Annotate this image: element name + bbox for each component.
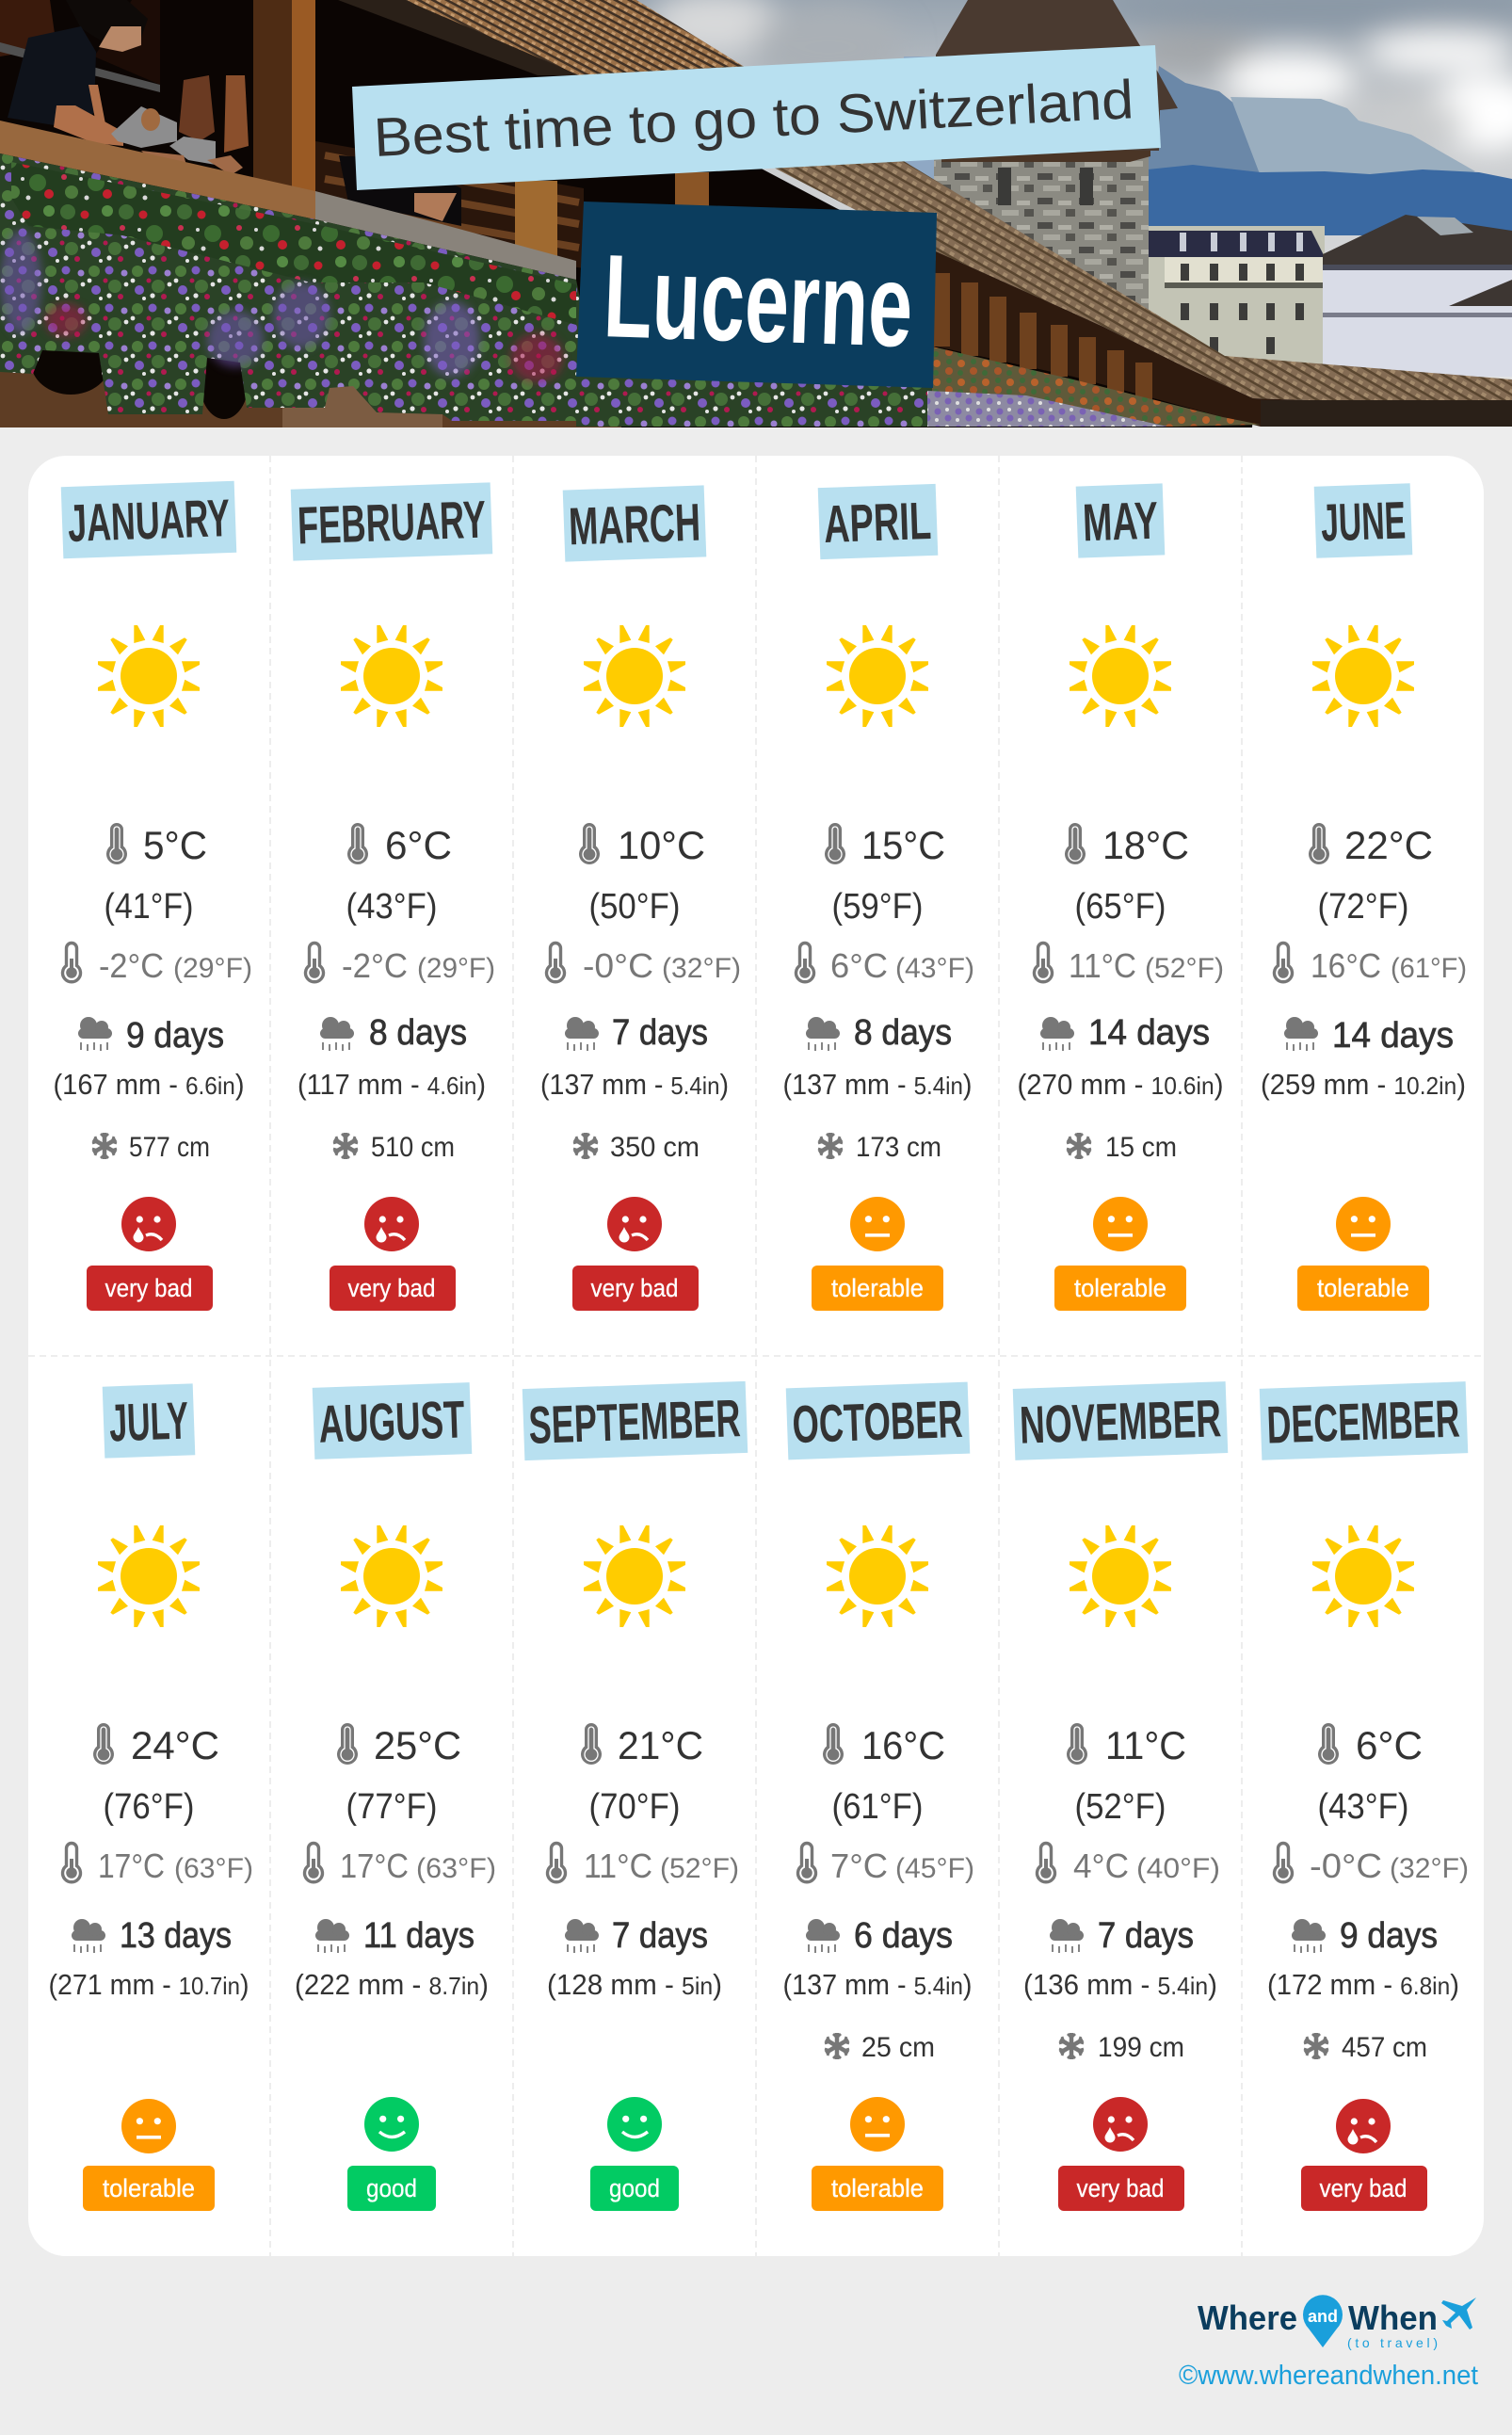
month label xyxy=(563,485,706,562)
rating badge xyxy=(1297,1266,1429,1311)
snowfall: 457 cm xyxy=(1342,2032,1427,2063)
icon: sun xyxy=(341,1525,442,1627)
month label xyxy=(523,1381,748,1460)
rain days: 9 days xyxy=(126,1016,224,1056)
rating badge xyxy=(83,2166,215,2211)
month label xyxy=(313,1382,472,1459)
logo: Where and When: Where xyxy=(1198,2298,1297,2337)
month label: JANUARY xyxy=(67,488,231,553)
low temperature: (63°F) xyxy=(174,1853,253,1884)
rain days: 9 days xyxy=(1340,1916,1438,1956)
rain days xyxy=(565,1916,708,1956)
low temperature xyxy=(1037,1844,1220,1885)
high temperature in Fahrenheit: (77°F) xyxy=(346,1787,437,1827)
low temperature: (32°F) xyxy=(1390,1853,1469,1884)
snowfall xyxy=(818,1132,941,1163)
precipitation: (172 mm - 6.8in) xyxy=(1267,1968,1459,2001)
rain days xyxy=(1292,1916,1438,1956)
month label xyxy=(61,481,236,558)
low temperature xyxy=(305,943,495,985)
rating icon xyxy=(1093,1197,1148,1251)
icon: airplane xyxy=(1441,2298,1476,2330)
logo: Where and When: When xyxy=(1348,2298,1438,2337)
high temperature in Fahrenheit: (70°F) xyxy=(589,1787,680,1827)
low temperature: -2°C xyxy=(342,946,408,985)
rain days xyxy=(72,1916,232,1956)
rain days xyxy=(315,1916,475,1956)
low temperature: (29°F) xyxy=(417,953,495,984)
icon: sun xyxy=(98,625,200,727)
rain days xyxy=(565,1013,708,1053)
icon: sun xyxy=(584,625,685,727)
rating icon xyxy=(850,2097,905,2152)
city banner xyxy=(576,202,937,388)
rating badge xyxy=(1058,2166,1184,2211)
month label: JULY xyxy=(108,1391,189,1452)
month label xyxy=(1013,1381,1228,1460)
rating badge xyxy=(572,1266,699,1311)
precipitation: (137 mm - 5.4in) xyxy=(783,1968,972,2001)
logo: Where and When xyxy=(1198,2295,1476,2350)
high temperature in Fahrenheit: (43°F) xyxy=(346,887,437,927)
month label: OCTOBER xyxy=(791,1389,964,1454)
month label: AUGUST xyxy=(317,1389,466,1454)
title text: Best time to go to Switzerland xyxy=(372,69,1135,169)
logo: Where and When: (to travel) xyxy=(1347,2335,1438,2350)
icon: sun xyxy=(827,625,928,727)
month label xyxy=(1314,483,1412,558)
high temperature xyxy=(106,823,207,867)
precipitation: (136 mm - 5.4in) xyxy=(1023,1968,1217,2001)
rain days xyxy=(320,1013,467,1053)
rating badge xyxy=(347,2166,436,2211)
header photo: Chapel Bridge in Lucerne xyxy=(0,0,1512,427)
snowfall xyxy=(1059,2032,1184,2063)
rating badge xyxy=(87,1266,213,1311)
high temperature in Fahrenheit: (72°F) xyxy=(1318,887,1408,927)
rain days: 13 days xyxy=(120,1916,232,1956)
rating icon xyxy=(607,1197,662,1251)
low temperature xyxy=(1275,943,1467,985)
high temperature xyxy=(581,1723,703,1767)
low temperature xyxy=(305,1844,496,1885)
rating icon xyxy=(121,2099,176,2153)
rating badge: tolerable xyxy=(1074,1274,1166,1302)
month label: NOVEMBER xyxy=(1019,1388,1222,1455)
high temperature xyxy=(1067,1723,1186,1767)
rating badge: tolerable xyxy=(103,2174,195,2202)
month: February xyxy=(291,482,495,1311)
precipitation: (137 mm - 5.4in) xyxy=(540,1068,729,1101)
rating badge xyxy=(1301,2166,1427,2211)
month label: MARCH xyxy=(568,492,701,556)
rain days: 7 days xyxy=(612,1013,708,1053)
icon: sun xyxy=(1312,625,1414,727)
rating badge: good xyxy=(366,2174,417,2202)
snowfall: 15 cm xyxy=(1105,1132,1177,1163)
high temperature: 25°C xyxy=(374,1723,461,1767)
high temperature: 11°C xyxy=(1105,1723,1186,1767)
high temperature xyxy=(825,823,945,867)
snowfall: 577 cm xyxy=(129,1132,210,1163)
month label xyxy=(1076,483,1165,558)
high temperature in Fahrenheit: (43°F) xyxy=(1318,1787,1408,1827)
icon: sun xyxy=(1312,1525,1414,1627)
high temperature in Fahrenheit: (52°F) xyxy=(1075,1787,1166,1827)
month: August xyxy=(295,1382,496,2211)
month label xyxy=(786,1382,970,1459)
rating icon xyxy=(364,2097,419,2152)
snowfall: 199 cm xyxy=(1098,2032,1184,2063)
high temperature in Fahrenheit: (41°F) xyxy=(104,887,194,927)
low temperature: 17°C xyxy=(340,1846,409,1885)
low temperature: -0°C xyxy=(583,946,653,985)
rating icon xyxy=(1336,1197,1391,1251)
low temperature xyxy=(546,943,741,985)
high temperature: 21°C xyxy=(618,1723,703,1767)
month label xyxy=(291,482,492,561)
icon: sun xyxy=(341,625,442,727)
snowfall xyxy=(1304,2032,1427,2063)
month label xyxy=(818,484,938,559)
low temperature: 4°C xyxy=(1073,1846,1129,1885)
month label: JUNE xyxy=(1320,490,1407,553)
icon: sun xyxy=(1070,625,1171,727)
rating badge: good xyxy=(609,2174,660,2202)
snowfall xyxy=(92,1132,210,1163)
rating badge: tolerable xyxy=(1317,1274,1409,1302)
snowfall: 173 cm xyxy=(856,1132,941,1163)
rating badge xyxy=(812,1266,943,1311)
title banner xyxy=(352,45,1161,190)
rating icon xyxy=(1093,2097,1148,2152)
rating badge xyxy=(1054,1266,1186,1311)
low temperature: 6°C xyxy=(830,946,888,985)
low temperature: (52°F) xyxy=(1145,953,1224,984)
snowfall xyxy=(825,2032,935,2063)
high temperature in Fahrenheit: (59°F) xyxy=(832,887,923,927)
snowfall xyxy=(573,1132,700,1163)
high temperature: 15°C xyxy=(861,823,945,867)
rating badge: very bad xyxy=(1320,2174,1407,2202)
month: January xyxy=(53,481,252,1311)
rain days: 8 days xyxy=(369,1013,467,1053)
city name: Lucerne xyxy=(602,231,915,372)
rating badge: very bad xyxy=(348,1274,435,1302)
rating badge xyxy=(330,1266,456,1311)
rating badge: tolerable xyxy=(831,2174,924,2202)
low temperature: 7°C xyxy=(830,1846,888,1885)
snowfall: 510 cm xyxy=(371,1132,455,1163)
precipitation: (270 mm - 10.6in) xyxy=(1017,1068,1224,1101)
month: March xyxy=(540,485,741,1311)
rating icon xyxy=(364,1197,419,1251)
month label: FEBRUARY xyxy=(297,490,487,555)
high temperature in Fahrenheit: (50°F) xyxy=(589,887,680,927)
rating icon xyxy=(607,2097,662,2152)
rating badge: very bad xyxy=(1077,2174,1164,2202)
low temperature xyxy=(796,943,974,985)
high temperature in Fahrenheit: (61°F) xyxy=(832,1787,923,1827)
month: July xyxy=(49,1383,253,2211)
rating badge: very bad xyxy=(591,1274,678,1302)
low temperature: (61°F) xyxy=(1391,953,1467,984)
rating badge xyxy=(812,2166,943,2211)
low temperature xyxy=(1034,943,1224,985)
rating badge xyxy=(590,2166,679,2211)
low temperature: 11°C xyxy=(1069,946,1136,985)
low temperature xyxy=(798,1844,974,1885)
month label: SEPTEMBER xyxy=(527,1388,742,1455)
icon: sun xyxy=(1070,1525,1171,1627)
high temperature xyxy=(823,1723,945,1767)
month: June xyxy=(1261,483,1467,1311)
high temperature: 18°C xyxy=(1102,823,1189,867)
high temperature xyxy=(1065,823,1189,867)
month: September xyxy=(523,1381,748,2211)
low temperature: (32°F) xyxy=(662,953,741,984)
month label: APRIL xyxy=(823,491,932,554)
precipitation: (137 mm - 5.4in) xyxy=(783,1068,972,1101)
high temperature: 6°C xyxy=(1356,1723,1423,1767)
high temperature: 10°C xyxy=(618,823,705,867)
high temperature xyxy=(347,823,452,867)
rating icon xyxy=(121,1197,176,1251)
month: November xyxy=(1013,1381,1228,2211)
rain days: 6 days xyxy=(854,1916,953,1956)
low temperature: (29°F) xyxy=(173,953,252,984)
rain days xyxy=(78,1016,224,1056)
month: April xyxy=(783,484,974,1311)
precipitation: (117 mm - 4.6in) xyxy=(298,1068,486,1101)
high temperature: 16°C xyxy=(861,1723,945,1767)
snowfall: 25 cm xyxy=(861,2032,935,2063)
month: May xyxy=(1017,483,1224,1311)
icon: sun xyxy=(827,1525,928,1627)
rain days: 7 days xyxy=(1098,1916,1194,1956)
precipitation: (259 mm - 10.2in) xyxy=(1261,1068,1466,1101)
rain days: 8 days xyxy=(854,1013,952,1053)
icon: sun xyxy=(98,1525,200,1627)
low temperature: -0°C xyxy=(1310,1846,1382,1885)
snowfall xyxy=(1067,1132,1177,1163)
rain days: 14 days xyxy=(1332,1016,1454,1056)
low temperature xyxy=(62,943,252,985)
snowfall: 350 cm xyxy=(610,1132,700,1163)
high temperature: 24°C xyxy=(131,1723,219,1767)
month label: MAY xyxy=(1082,491,1159,552)
snowfall xyxy=(333,1132,455,1163)
rain days: 7 days xyxy=(612,1916,708,1956)
icon: sun xyxy=(584,1525,685,1627)
high temperature in Fahrenheit: (76°F) xyxy=(104,1787,194,1827)
low temperature: (45°F) xyxy=(895,1853,974,1884)
panel: monthly calendar xyxy=(28,456,1484,2256)
month: December xyxy=(1260,1381,1469,2211)
month: October xyxy=(783,1382,974,2211)
low temperature xyxy=(548,1844,739,1885)
high temperature: 6°C xyxy=(385,823,452,867)
rating icon xyxy=(850,1197,905,1251)
logo: Where and When: and xyxy=(1308,2307,1338,2326)
rain days: 11 days xyxy=(363,1916,475,1956)
low temperature: 16°C xyxy=(1311,946,1381,985)
precipitation: (128 mm - 5in) xyxy=(547,1968,722,2001)
low temperature: (63°F) xyxy=(416,1853,496,1884)
rating badge: tolerable xyxy=(831,1274,924,1302)
high temperature: 22°C xyxy=(1344,823,1433,867)
low temperature: (40°F) xyxy=(1136,1853,1220,1884)
low temperature: -2°C xyxy=(99,946,164,985)
low temperature xyxy=(62,1844,253,1885)
month label xyxy=(103,1383,195,1459)
precipitation: (271 mm - 10.7in) xyxy=(49,1968,249,2001)
low temperature: 17°C xyxy=(98,1846,165,1885)
high temperature: 5°C xyxy=(143,823,207,867)
rain days xyxy=(806,1013,952,1053)
rain days: 14 days xyxy=(1088,1013,1210,1053)
rain days xyxy=(1050,1916,1194,1956)
low temperature: (52°F) xyxy=(660,1853,739,1884)
rating icon xyxy=(1336,2099,1391,2153)
low temperature: 11°C xyxy=(584,1846,652,1885)
high temperature in Fahrenheit: (65°F) xyxy=(1075,887,1166,927)
high temperature xyxy=(579,823,705,867)
website credit: ©www.whereandwhen.net xyxy=(1179,2361,1478,2391)
high temperature xyxy=(1318,1723,1423,1767)
rating badge: very bad xyxy=(105,1274,192,1302)
precipitation: (167 mm - 6.6in) xyxy=(53,1068,245,1101)
rain days xyxy=(806,1916,953,1956)
low temperature: (43°F) xyxy=(895,953,974,984)
low temperature xyxy=(1275,1844,1469,1885)
precipitation: (222 mm - 8.7in) xyxy=(295,1968,489,2001)
